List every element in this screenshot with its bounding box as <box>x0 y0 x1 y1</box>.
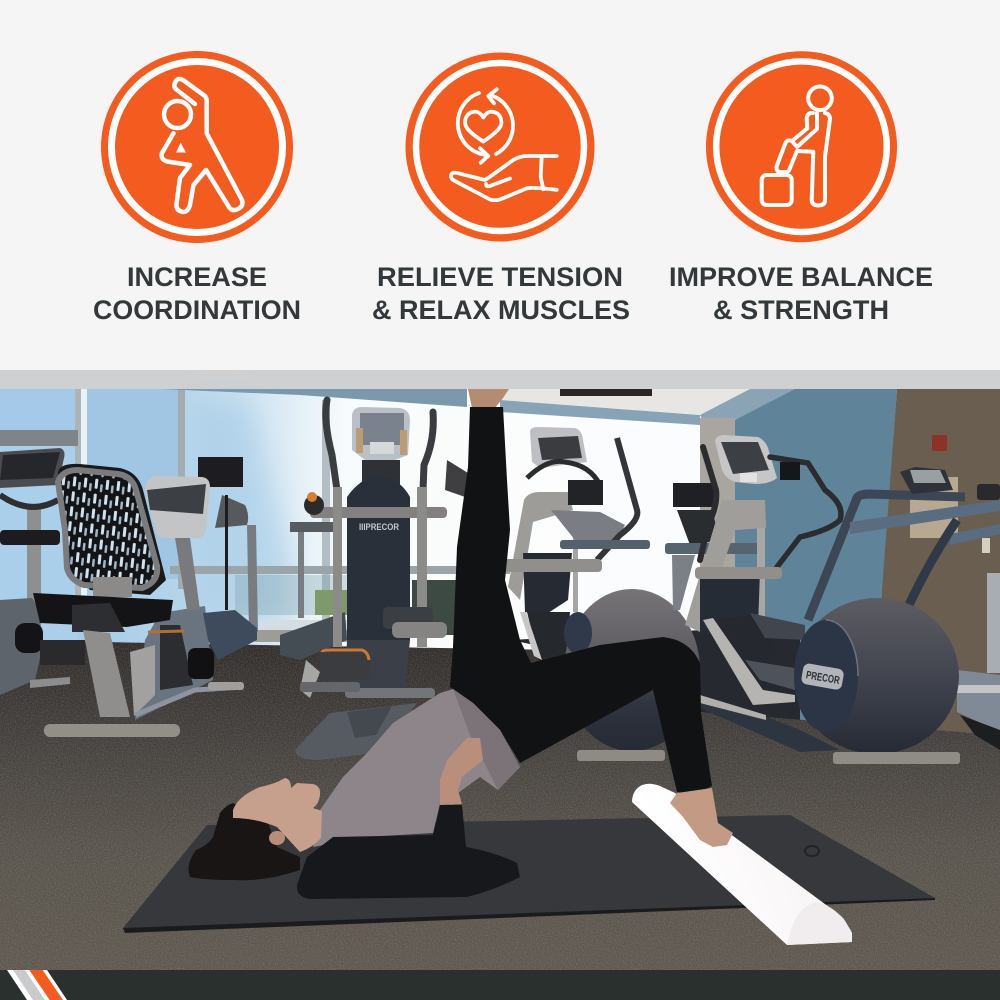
shirt <box>313 689 520 847</box>
ear <box>269 831 285 845</box>
half foam roller <box>632 784 852 945</box>
photo: woman doing bridge on half foam roller in gym <box>0 389 1000 970</box>
face and neck <box>233 778 322 852</box>
yoga mat <box>123 815 935 933</box>
leggings <box>450 407 712 793</box>
label: relieve tension and relax muscles: & RELAX MUSCLES <box>372 295 630 325</box>
foot on roller <box>670 788 733 847</box>
icon: heart and hand badge <box>406 52 594 242</box>
label: improve balance and strength: IMPROVE BALANCE <box>669 262 933 292</box>
mat logo <box>805 846 819 856</box>
footer logo stripes <box>7 970 67 1000</box>
brand badge: PRECOR <box>805 669 841 687</box>
label: improve balance and strength <box>669 262 933 325</box>
benefit: relieve tension <box>372 52 630 325</box>
treadmill: far left <box>0 448 85 695</box>
footer bar <box>0 970 1000 1000</box>
dark area behind machines <box>510 625 800 725</box>
label: increase coordination: COORDINATION <box>93 295 301 325</box>
brand text: IIIPRECOR <box>359 522 399 532</box>
supporting arm and hand <box>440 738 483 805</box>
top panel background <box>0 0 1000 370</box>
ceiling and walls <box>160 389 1000 750</box>
elliptical: middle <box>502 427 650 665</box>
label: improve balance and strength: & STRENGTH <box>713 295 889 325</box>
jacket under back <box>297 805 520 899</box>
floor speckle texture <box>0 640 1000 970</box>
woman <box>188 389 733 899</box>
label: relieve tension and relax muscles <box>372 262 630 325</box>
brand badge <box>801 663 845 690</box>
label: relieve tension and relax muscles: RELIEVE TENSION <box>377 262 623 292</box>
elliptical: right <box>665 435 841 752</box>
label: increase coordination <box>93 262 301 325</box>
elliptical flywheel ball: right <box>794 598 960 764</box>
treadmill: behind elliptical <box>280 522 347 660</box>
benefit: increase coordination <box>93 51 301 325</box>
fire alarm <box>932 435 947 451</box>
icon: person stepping on block badge <box>706 51 897 242</box>
benefit: improve balance <box>669 51 933 325</box>
label: increase coordination: INCREASE <box>127 262 267 292</box>
treadmill: far right <box>808 467 1000 750</box>
windows background <box>0 389 710 669</box>
divider band <box>0 370 1000 389</box>
hair <box>188 803 300 880</box>
elliptical: center with console <box>295 400 468 760</box>
recumbent bike <box>33 464 244 737</box>
treadmill: near window <box>145 457 258 660</box>
floor <box>0 640 1000 970</box>
elliptical flywheel ball: middle <box>564 589 700 761</box>
raised foot <box>468 389 509 408</box>
icon: stretching person badge <box>101 51 293 243</box>
